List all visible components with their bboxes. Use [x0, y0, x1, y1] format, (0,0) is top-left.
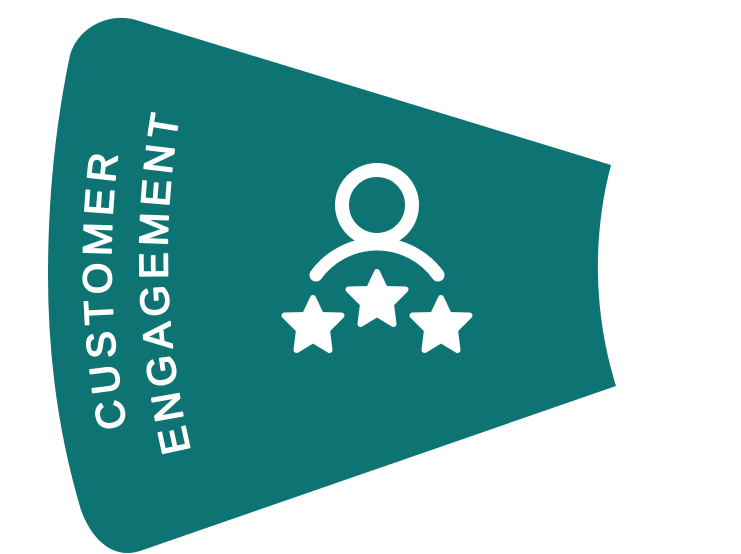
icon: person with three stars	[284, 170, 470, 350]
heading: customer engagement: ENGAGEMENT	[138, 112, 190, 454]
heading: customer engagement: CUSTOMER	[82, 154, 126, 428]
panel: curved teal segment	[48, 18, 616, 553]
heading: customer engagement	[82, 112, 190, 454]
